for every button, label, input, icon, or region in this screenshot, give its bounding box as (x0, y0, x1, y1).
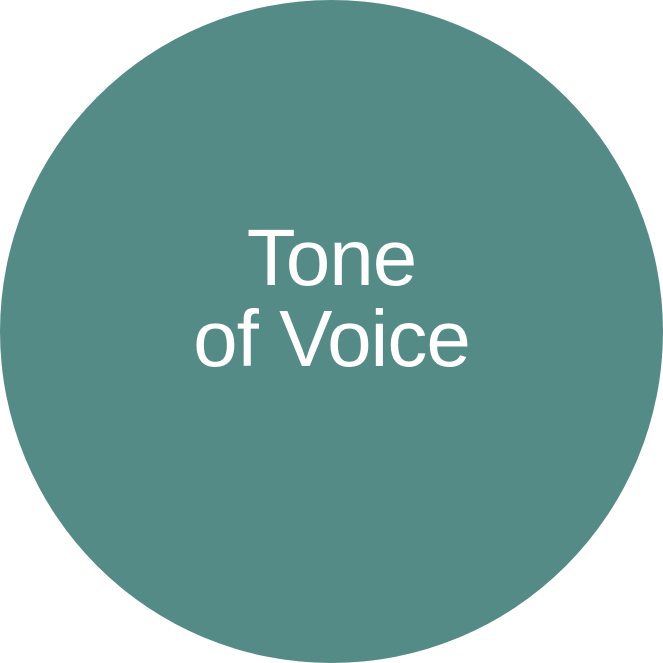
title: Tone of Voice: of Voice (193, 294, 470, 383)
title: Tone of Voice: Tone (247, 213, 416, 302)
